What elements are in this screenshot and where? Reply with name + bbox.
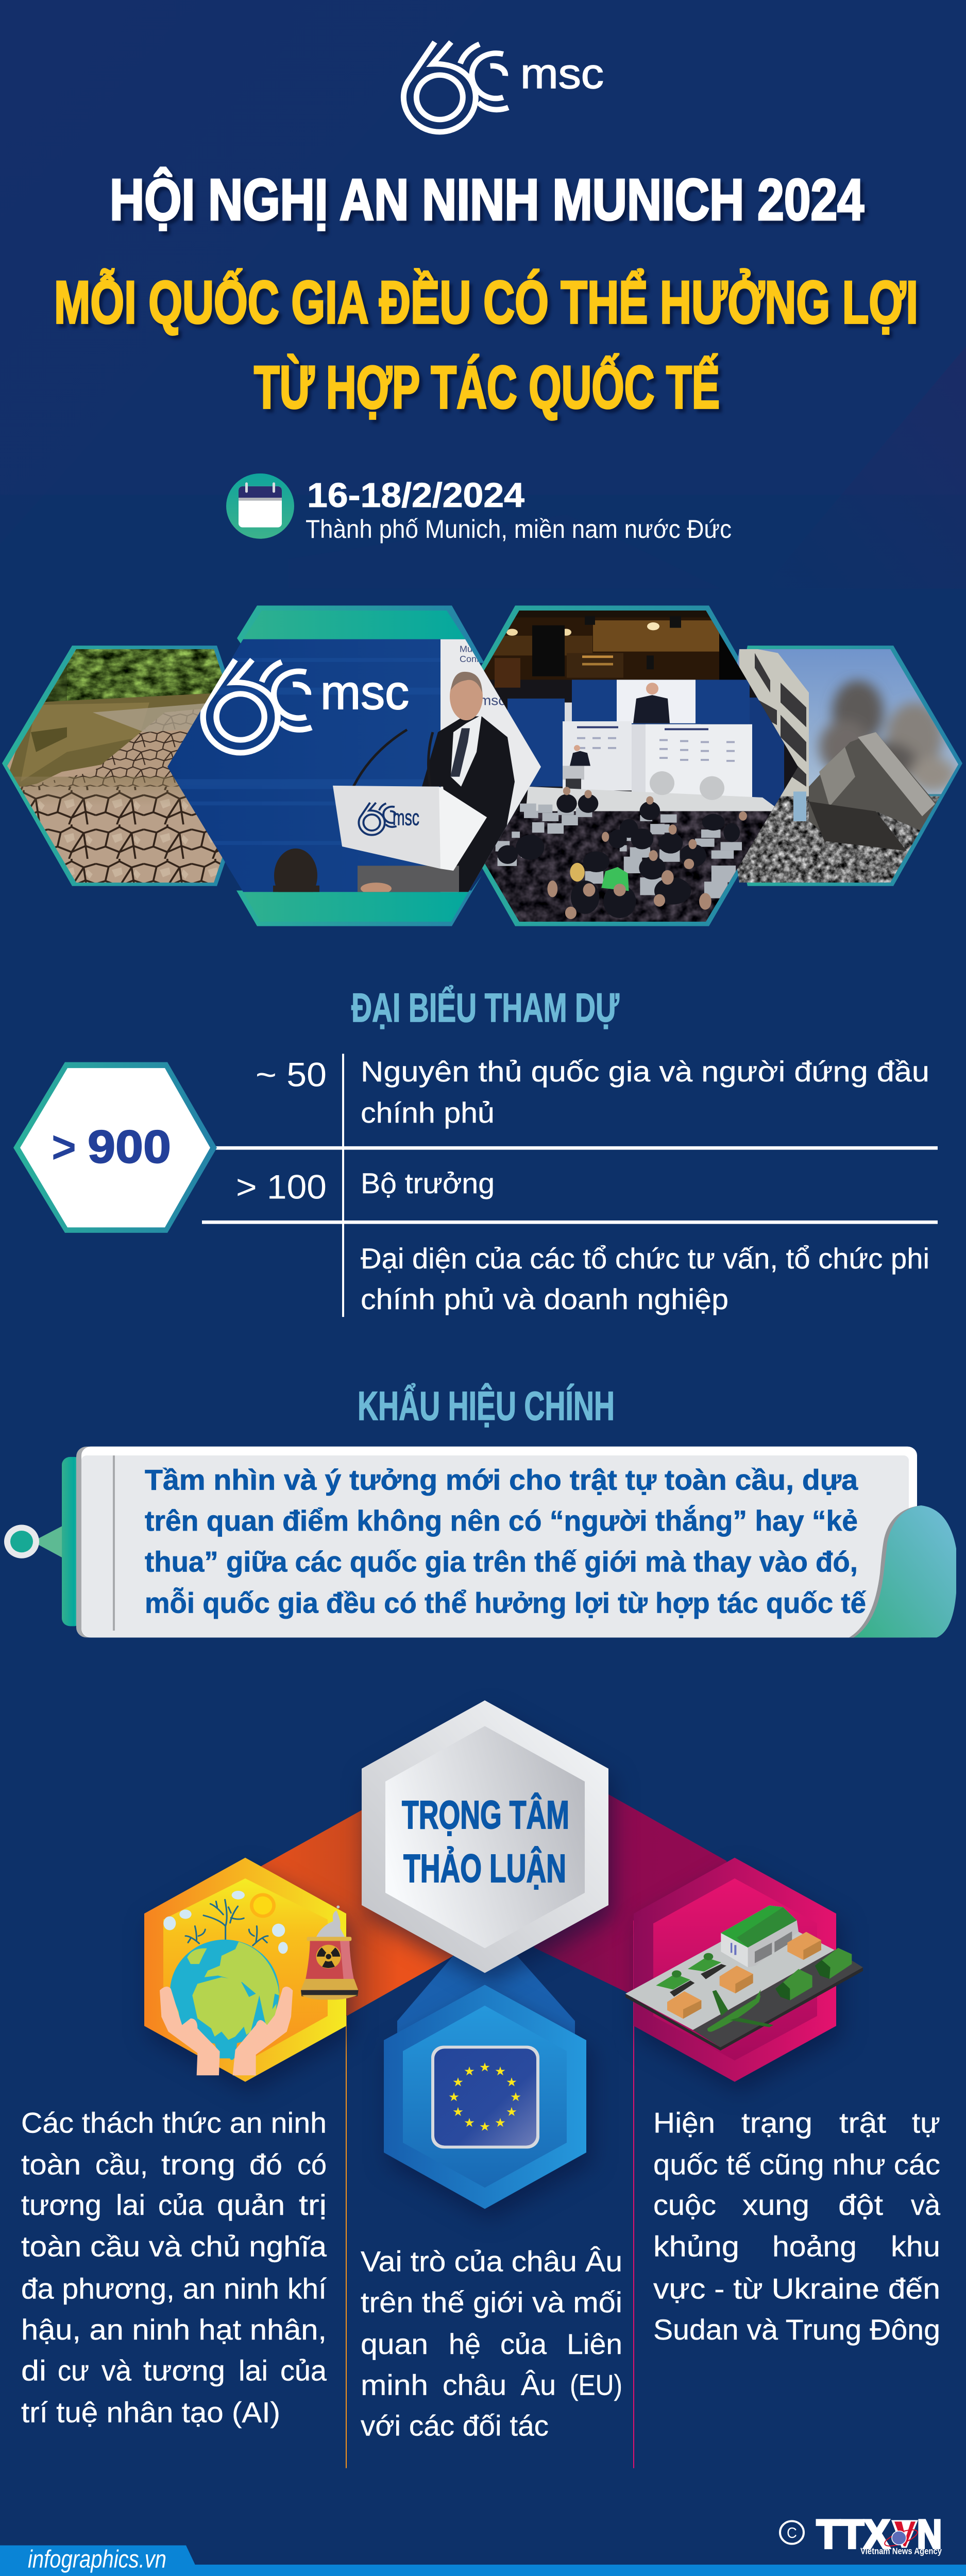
text column: international order: quốc tế cũng như các [653,2149,940,2181]
heading: delegates: ĐẠI BIỂU THAM DỰ [351,985,619,1031]
text column: global challenges: hậu, an ninh hạt nhân, [21,2314,327,2346]
row: heads of state: Nguyên thủ quốc gia và người đứng đầu [361,1056,929,1088]
text column: global challenges: tương [21,2190,101,2222]
text column: global challenges: di [21,2355,46,2387]
text column: global challenges: có [297,2149,327,2181]
clouds [163,1891,288,1954]
text column: global challenges: tương [143,2355,225,2387]
text column: role of Europe: minh [361,2370,428,2401]
date and place: Thành phố Munich, miền nam nước Đức [306,515,732,544]
hexagon: military [625,1858,863,2082]
panel: delegates table [13,1054,938,1317]
sun [250,1893,276,1918]
back wall and screens [507,699,565,787]
row: organizations [361,1243,929,1316]
text column: global challenges: trong [161,2149,235,2181]
panel: discussion focus diagram [144,1700,863,2468]
text column: international order: và [911,2190,940,2222]
text column: global challenges: quản [217,2190,285,2222]
text column: global challenges: cầu, [95,2149,148,2181]
text column: global challenges: và [101,2355,131,2387]
text column: role of Europe: trên thế giới và mối [361,2287,622,2319]
logo: MSC 60 [403,42,604,132]
audience head [274,848,317,892]
row: ministers: Bộ trưởng [361,1168,495,1200]
agency wordmark: N [917,2512,942,2556]
photo: Olaf Scholz at MSC podium: Munich [460,644,489,654]
trees [185,1900,268,1945]
hangar [721,1906,798,1968]
row: organizations: chính phủ và doanh nghiệp [361,1284,728,1316]
text column: role of Europe: Âu [521,2369,556,2401]
podium [358,866,459,892]
text column: global challenges: cư [58,2355,89,2387]
text column: international order: Sudan và Trung Đông [653,2314,940,2346]
pointer ring [4,1524,62,1558]
text column: role of Europe: hệ [449,2329,481,2361]
slogan text: Tầm nhìn và ý tưởng mới cho trật tự toàn cầu, dựa [145,1464,858,1496]
slogan text: mỗi quốc gia đều có thể hưởng lợi từ hợp tác quốc tế [145,1587,866,1619]
backdrops [563,721,632,790]
title line 3: TỪ HỢP TÁC QUỐC TẾ [254,354,720,421]
heading: main slogan: KHẨU HIỆU CHÍNH [358,1383,615,1429]
hexagon: silver title: THẢO LUẬN [403,1846,566,1890]
dividers [346,2016,347,2468]
microphones [353,730,433,787]
nuclear tower [301,1906,359,1999]
orange connector [245,1810,464,2016]
text column: global challenges: trí tuệ nhân tạo (AI) [21,2397,280,2429]
text column: role of Europe: quan [361,2329,428,2361]
text column: international order [653,2108,940,2346]
hexagon: total delegates: 900 [88,1121,171,1173]
footer site name: infographics.vn [28,2546,166,2573]
Scholz figure [422,716,515,895]
text column: role of Europe: của [500,2329,547,2361]
row: heads of state: chính phủ [361,1097,495,1129]
trucks [775,1948,852,2001]
icon: EU flag [431,2046,539,2148]
slogan text: thua” giữa các quốc gia trên thế giới mà thay vào đó, [145,1547,858,1578]
hexagon: silver title: TRỌNG TÂM [402,1793,569,1837]
slogan text [145,1464,866,1619]
text column: global challenges [21,2108,327,2429]
photo: ruined building [721,646,963,890]
text column: international order: trạng [741,2108,812,2139]
text column: global challenges: toàn [21,2149,81,2181]
row: ministers [236,1168,495,1206]
text column: role of Europe: châu [443,2370,506,2401]
text column: international order: đột [838,2190,883,2222]
hands [160,1987,220,2075]
row: heads of state [256,1056,929,1129]
date and place [306,476,732,544]
icon: calendar [226,473,294,539]
lamps [506,629,518,636]
panel: slogan scroll [4,1447,956,1637]
text column: role of Europe [361,2246,622,2442]
photo frame: plenary hexagon border [425,605,802,926]
hexagon: European Union [384,1985,586,2209]
agency wordmark: Vietnam News Agency [860,2546,942,2556]
agency wordmark [817,2512,942,2556]
text column: international order: cuộc [653,2190,716,2222]
text column: international order: hoảng [772,2231,857,2263]
photo: Olaf Scholz at MSC podium: msc [393,806,419,830]
text column: international order: Hiện [653,2108,715,2139]
text column: global challenges: đó [249,2149,282,2181]
text column: international order: trật [839,2108,886,2139]
text column: international order: tự [912,2108,940,2139]
photo: Olaf Scholz at MSC podium: msc [479,692,505,708]
text column: global challenges: đa phương, an ninh khí [21,2273,327,2305]
hexagon: total delegates [13,1062,217,1233]
crates [667,1932,821,2019]
text column: global challenges: toàn cầu và chủ nghĩa [21,2231,327,2263]
photo: Olaf Scholz at MSC podium: Confer [460,654,487,664]
photo: Olaf Scholz at MSC podium: msc [320,666,409,720]
photo: Olaf Scholz at MSC podium [165,605,546,926]
text column: role of Europe: với các đối tác [361,2410,549,2442]
aircraft [707,1990,774,2032]
globe [170,1940,279,2044]
smoke [819,680,956,791]
photo: plenary hall [484,611,798,922]
date and place: 16-18/2/2024 [307,476,524,515]
copyright mark [780,2521,804,2544]
footer bar [0,2545,966,2576]
tanks [656,1953,726,1997]
text column: international order: vực - từ Ukraine đến [653,2273,940,2305]
panel: hexagon photo strip [0,605,963,927]
hexagon: total delegates: > [52,1122,76,1173]
magenta connector [515,1794,727,1996]
text column: global challenges: Các thách thức an ninh [21,2108,327,2139]
blue connector [397,1956,575,2048]
row: heads of state: ~ 50 [256,1056,327,1094]
text column: role of Europe: (EU) [570,2370,622,2401]
text column: role of Europe: Liên [567,2329,622,2361]
copyright and TTXVN logo [780,2512,942,2556]
row: organizations: Đại diện của các tổ chức tư vấn, tổ chức phi [361,1243,929,1275]
slogan text: trên quan điểm không nên có “người thắng” hay “kẻ [145,1504,858,1537]
icon: globe and tower [160,1891,359,2075]
photo: drought [2,646,225,886]
text column: global challenges: lai [239,2355,268,2387]
text column: global challenges: lai [116,2190,145,2222]
hexagon: silver title [362,1700,608,1973]
text column: international order: khu [891,2231,940,2263]
copyright mark: C [787,2525,797,2541]
logo: MSC 60: msc [520,49,604,97]
text column: international order: xung [742,2190,809,2222]
text column: role of Europe: Vai trò của châu Âu [361,2246,622,2278]
row: ministers: > 100 [236,1168,327,1206]
title [54,166,918,421]
text column: global challenges: của [158,2190,204,2222]
hexagon: climate and nuclear [144,1858,359,2082]
scroll curl [849,1505,921,1637]
speaker on stage [570,751,590,766]
text column: global challenges: trị [299,2190,327,2222]
text column: international order: khủng [653,2231,739,2263]
divider lines [202,1054,938,1317]
text column: global challenges: của [280,2355,327,2387]
icon: military base [625,1906,863,2050]
audience [485,811,772,922]
agency wordmark: TTX [817,2512,890,2556]
stage floor [526,787,778,815]
